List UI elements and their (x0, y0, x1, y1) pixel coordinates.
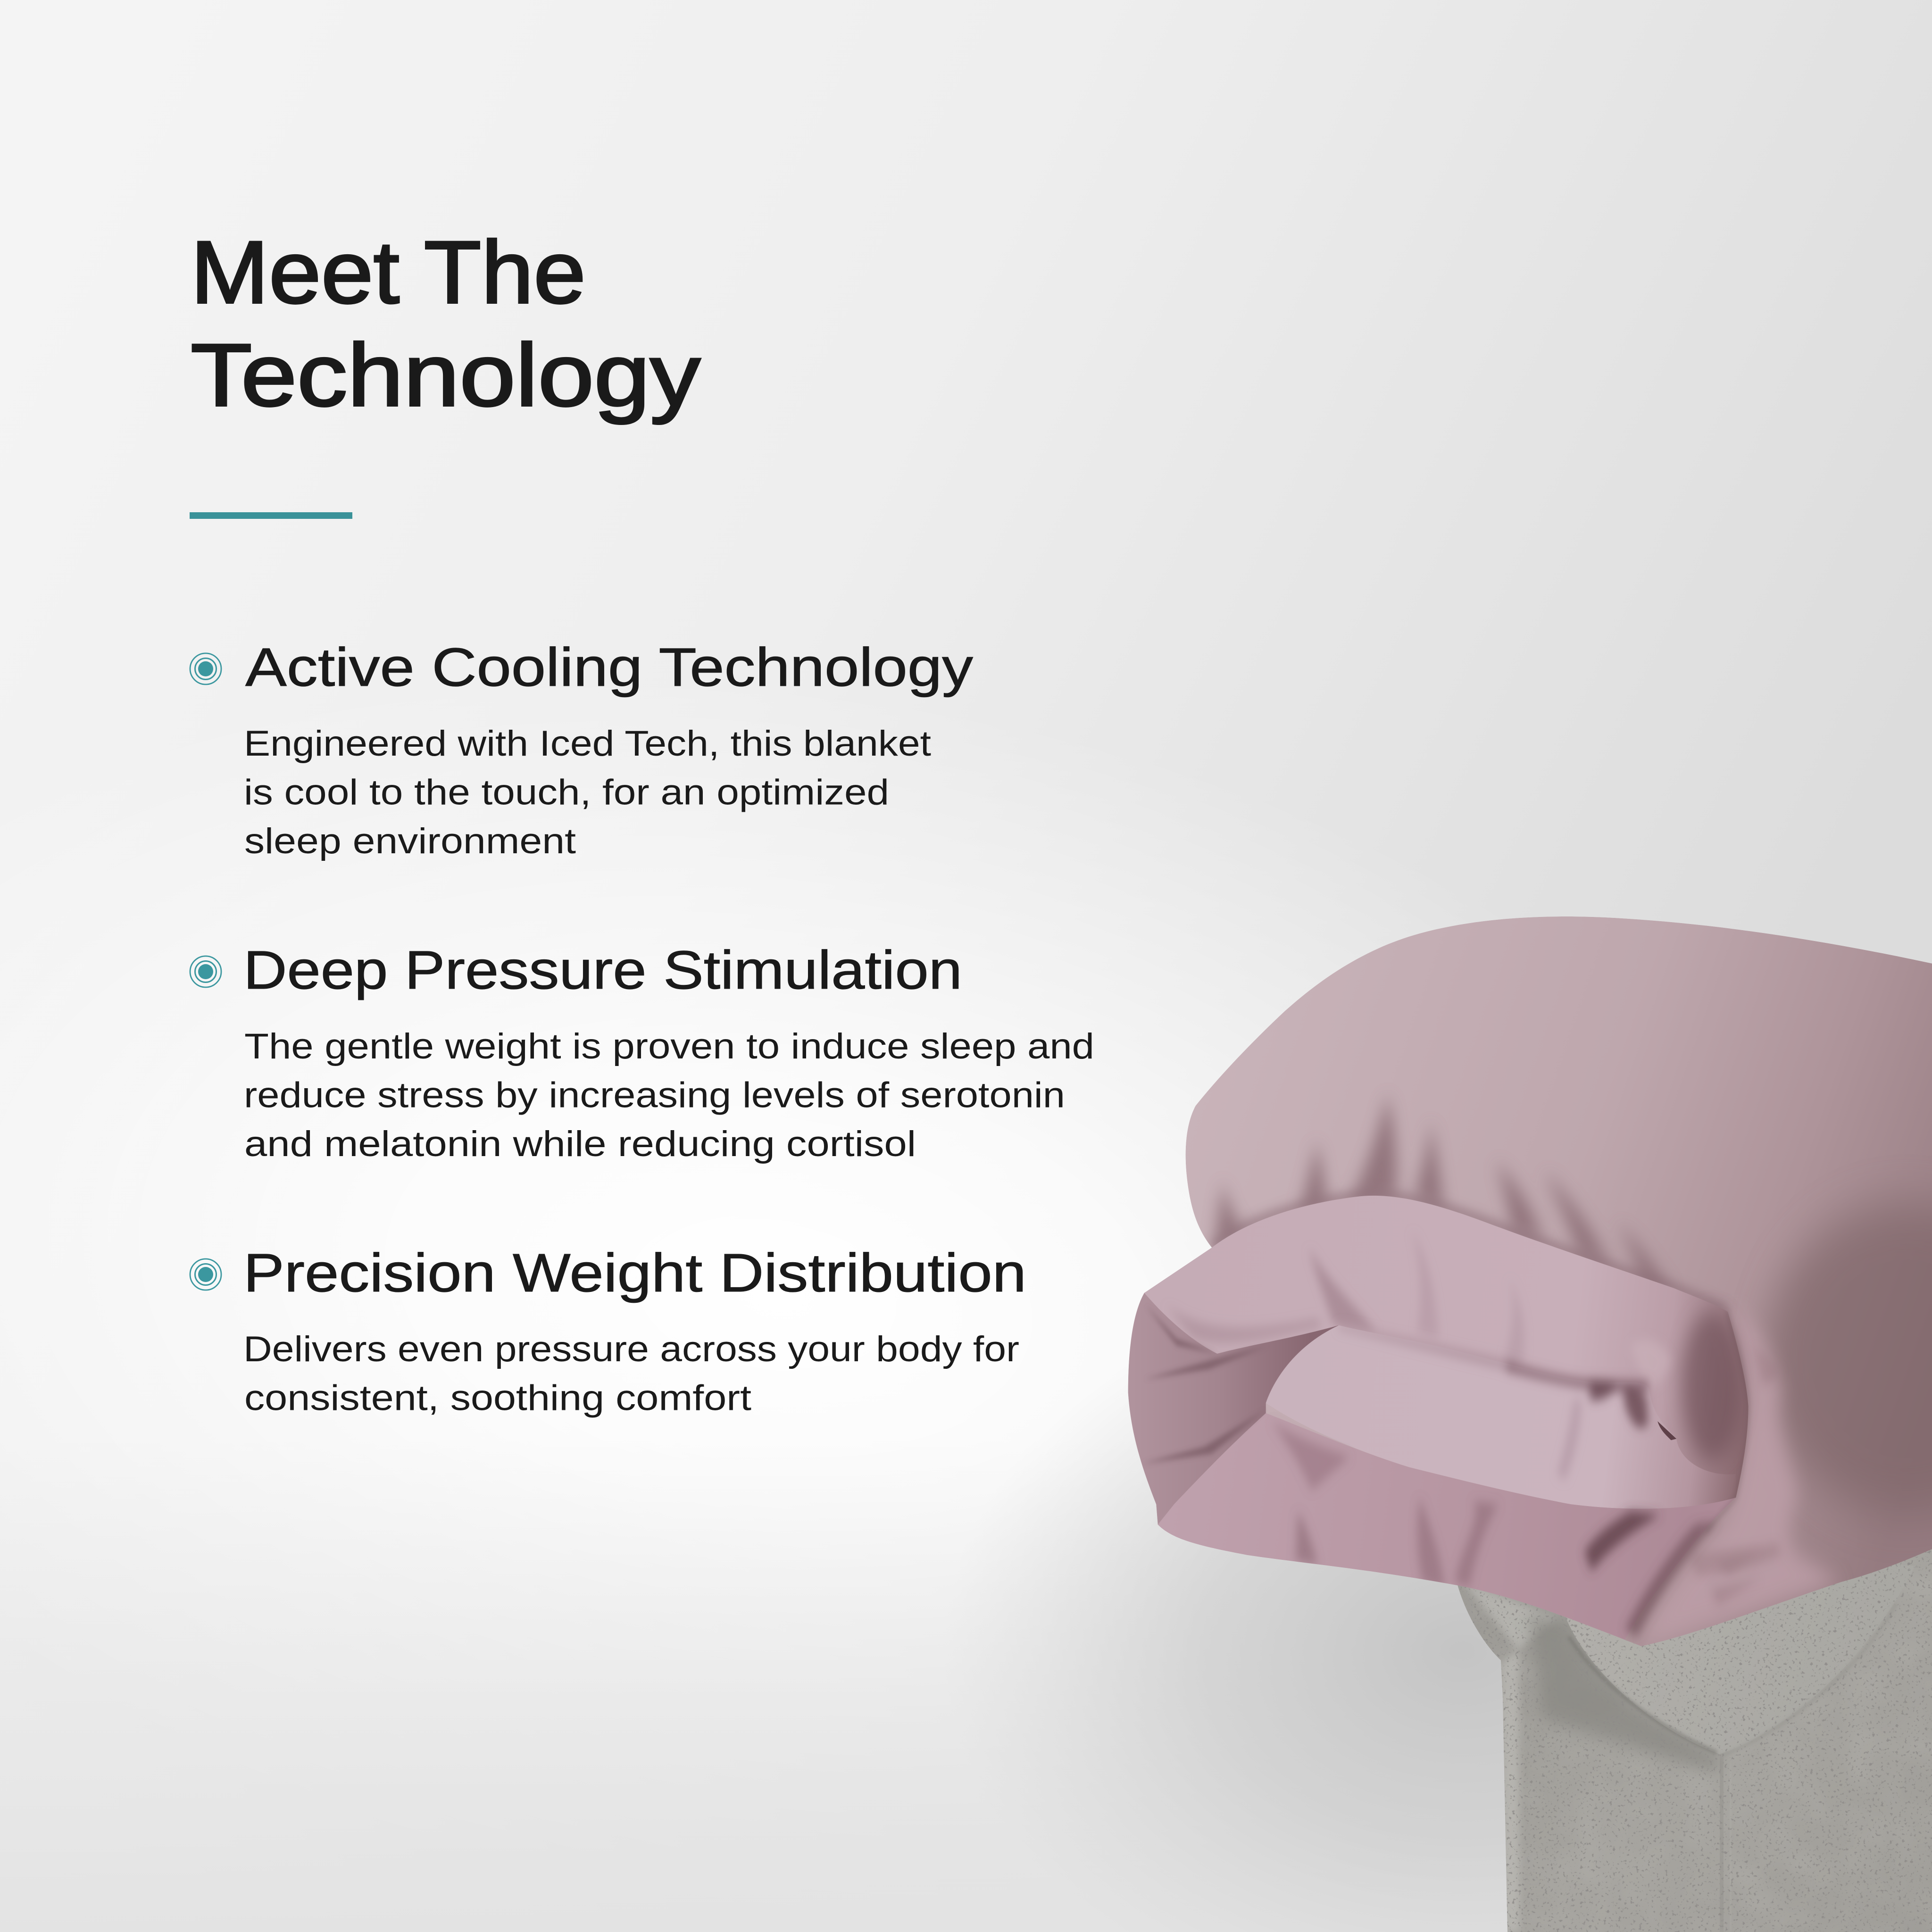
inner curl highlight (1631, 1339, 1671, 1390)
heading: deep pressure stimulation: Deep Pressure Stimulation (243, 940, 962, 1000)
body text: deep pressure: reduce stress by increasing levels of serotonin (244, 1075, 1065, 1115)
icon: target bullet (190, 1259, 221, 1290)
body text: deep pressure: and melatonin while reducing cortisol (244, 1124, 916, 1164)
title underline accent (190, 512, 352, 519)
heading: precision weight distribution: Precision Weight Distribution (243, 1243, 1026, 1303)
blanket (1128, 916, 1932, 1646)
inner lens pillow (1266, 1325, 1736, 1509)
concrete bowl (1566, 1611, 1765, 1754)
body text: deep pressure (244, 1026, 1094, 1164)
crease by right side gap (1706, 1312, 1749, 1532)
body text: precision weight: consistent, soothing comfort (244, 1378, 751, 1418)
pleats on right wrap (1712, 1346, 1782, 1606)
body text: active cooling: Engineered with Iced Tech, this blanket (244, 724, 931, 764)
body text: active cooling (244, 724, 931, 861)
body text: active cooling: is cool to the touch, for an optimized (244, 773, 889, 812)
body text: deep pressure: The gentle weight is proven to induce sleep and (244, 1026, 1094, 1066)
concrete pedestal (1457, 1509, 1932, 1932)
title: Technology (191, 325, 700, 425)
lower fold (1158, 1413, 1736, 1640)
middle fold (1144, 1196, 1749, 1499)
feature: deep pressure stimulation (190, 940, 1094, 1164)
folds on upper layer (1215, 1096, 1674, 1295)
feature: precision weight distribution (190, 1243, 1026, 1418)
light rim of right wrap (1641, 1311, 1841, 1646)
left inner side (1128, 1293, 1339, 1524)
icon: target bullet (190, 956, 221, 987)
body text: active cooling: sleep environment (244, 821, 576, 861)
title (191, 223, 700, 425)
title: Meet The (191, 223, 586, 322)
top fold and right wrap (1128, 916, 1932, 1646)
feature: active cooling technology (190, 637, 974, 861)
body text: precision weight: Delivers even pressure across your body for (243, 1329, 1019, 1369)
heading: active cooling technology: Active Cooling Technology (245, 637, 974, 698)
icon: target bullet (190, 653, 221, 684)
body text: precision weight (243, 1329, 1019, 1418)
